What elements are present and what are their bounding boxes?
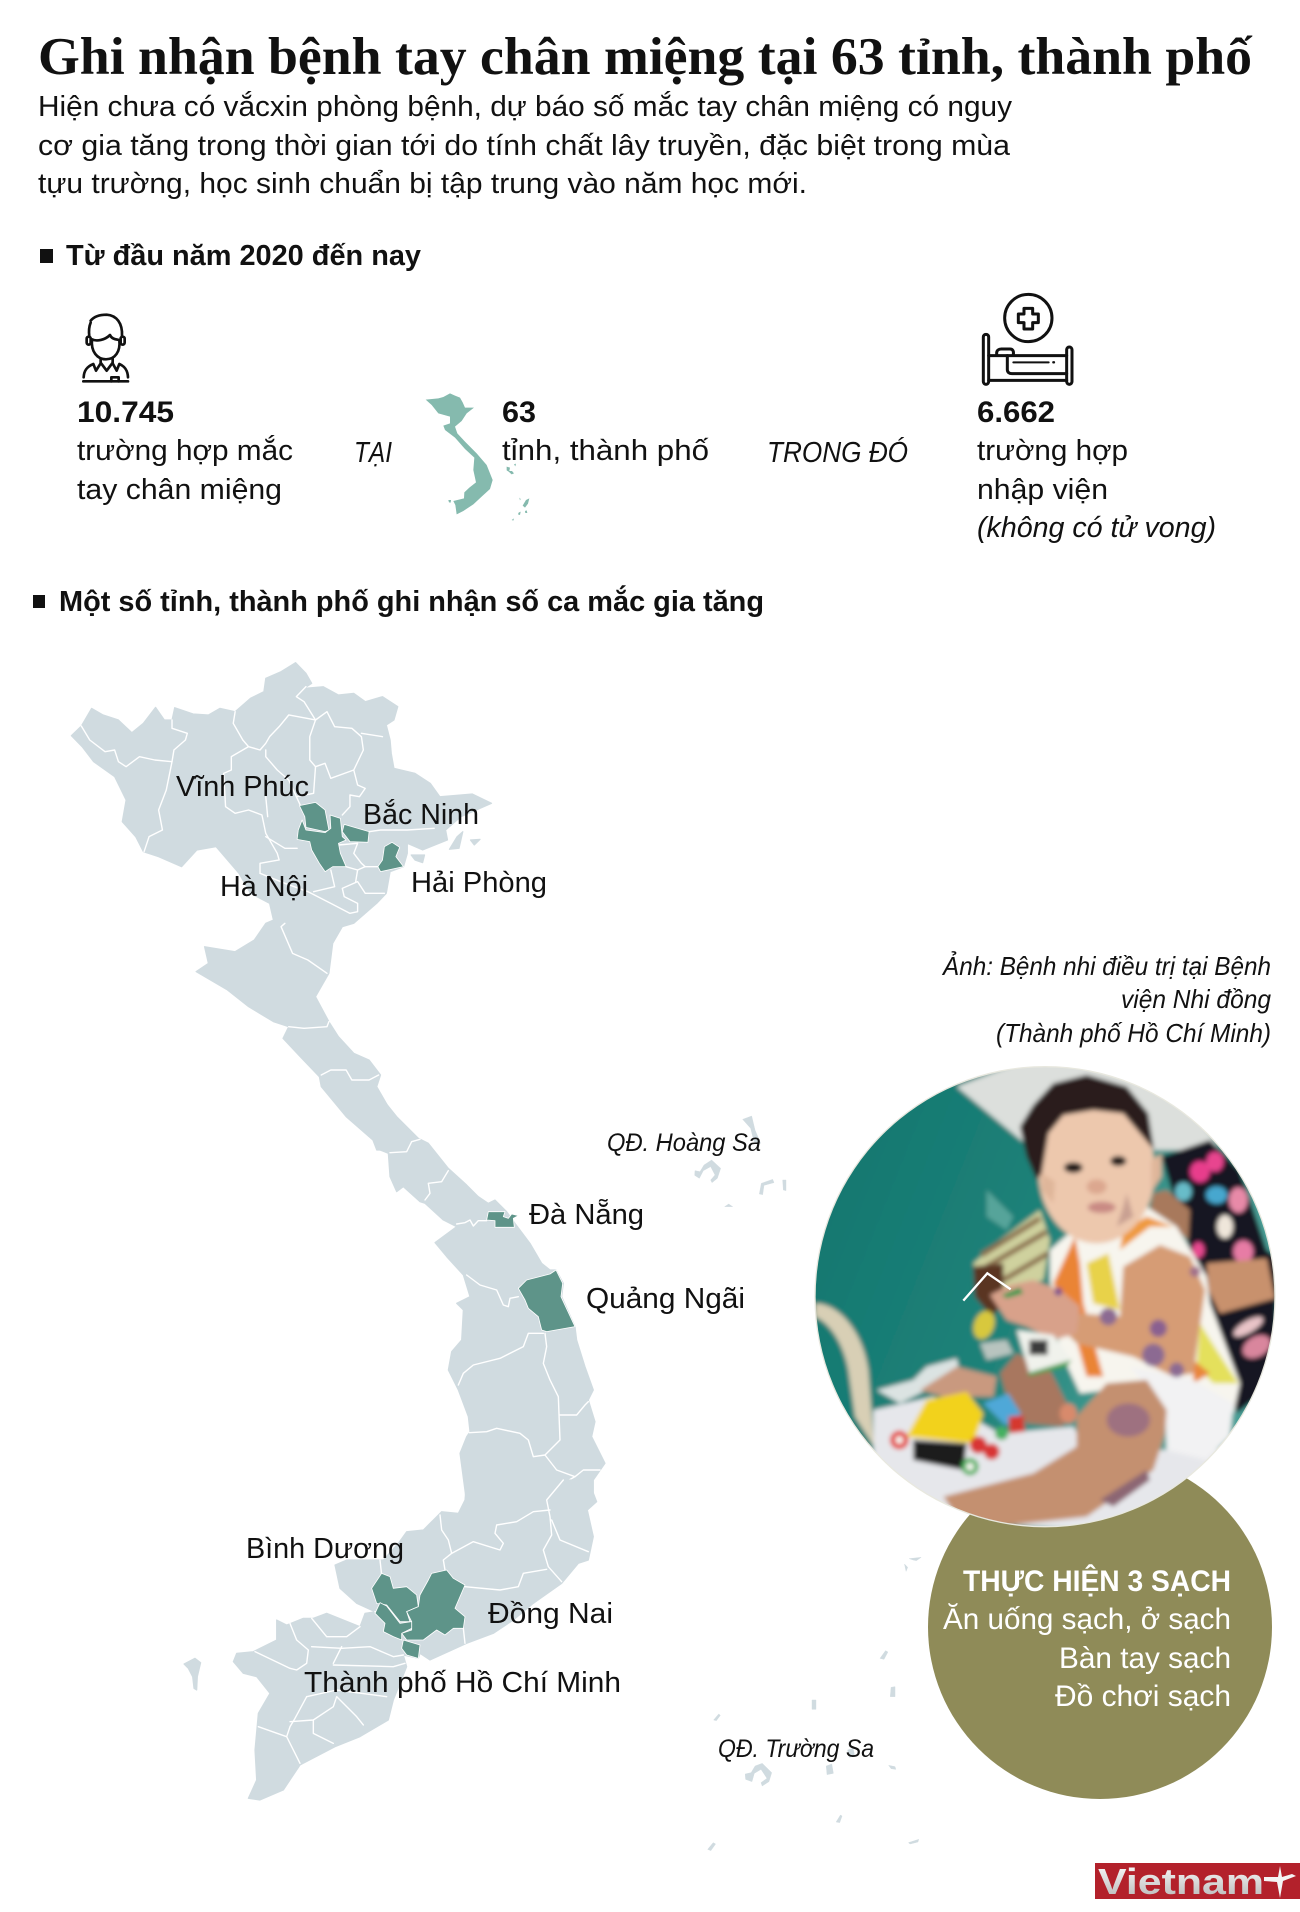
map labels: archipelagos <box>607 1129 874 1763</box>
highlighted: Dong Nai <box>402 1570 465 1640</box>
stat: provinces: tỉnh, thành phố <box>502 435 709 467</box>
highlighted: Bac Ninh <box>342 824 369 842</box>
map labels: provinces: Thành phố Hồ Chí Minh <box>304 1667 621 1699</box>
photo caption <box>941 950 1272 1048</box>
map: central region <box>335 1100 605 1503</box>
map labels: provinces: Vĩnh Phúc <box>176 771 309 803</box>
stat: cases: 10.745 <box>77 396 174 429</box>
photo: child patient <box>814 1066 1276 1528</box>
stat: cases: trường hợp mắc <box>77 434 293 467</box>
map: southern region <box>184 1480 597 1800</box>
stat: hospitalised: trường hợp <box>977 435 1128 467</box>
map labels: provinces <box>176 771 745 1699</box>
map labels: provinces: Hà Nội <box>220 871 308 903</box>
stat: hospitalised: 6.662 <box>977 396 1055 429</box>
stat: provinces: 63 <box>502 396 536 429</box>
stat: cases: tay chân miệng <box>77 474 282 506</box>
callout: three cleans <box>928 1455 1272 1799</box>
map labels: provinces: Bình Dương <box>246 1533 404 1565</box>
callout: three cleans: Bàn tay sạch <box>1059 1642 1231 1675</box>
logo: Vietnam+: Vietnam <box>1098 1861 1264 1902</box>
callout: three cleans: Đồ chơi sạch <box>1055 1680 1231 1713</box>
photo caption: viện Nhi đồng <box>1121 984 1272 1014</box>
highlighted: Vinh Phuc <box>299 802 329 832</box>
highlighted: Da Nang <box>487 1212 518 1227</box>
stat: hospitalised <box>977 396 1216 544</box>
photo caption: Ảnh: Bệnh nhi điều trị tại Bệnh <box>941 950 1271 981</box>
highlighted: Ha Noi <box>297 815 346 872</box>
map labels: archipelagos: QĐ. Trường Sa <box>718 1735 874 1763</box>
photo caption: (Thành phố Hồ Chí Minh) <box>996 1018 1271 1048</box>
heading: provinces with rising cases: Một số tỉnh, thành phố ghi nhận số ca mắc gia tăng <box>59 584 764 618</box>
stat: hospitalised: (không có tử vong) <box>977 512 1216 544</box>
logo: Vietnam+ <box>1095 1861 1300 1902</box>
highlighted: Binh Duong <box>372 1573 418 1622</box>
islands: Hoang Sa <box>695 1116 786 1207</box>
highlighted: Hai Phong <box>378 842 404 872</box>
stat: provinces <box>502 396 709 467</box>
map labels: provinces: Quảng Ngãi <box>586 1283 745 1315</box>
intro text: cơ gia tăng trong thời gian tới do tính chất lây truyền, đặc biệt trong mùa <box>38 130 1011 162</box>
intro text: tựu trường, học sinh chuẩn bị tập trung vào năm học mới. <box>38 168 807 200</box>
intro text <box>38 90 1013 200</box>
label: of which: TRONG ĐÓ <box>767 436 908 469</box>
map labels: archipelagos: QĐ. Hoàng Sa <box>607 1129 761 1157</box>
map labels: provinces: Đồng Nai <box>488 1598 613 1630</box>
stat: hospitalised: nhập viện <box>977 474 1108 506</box>
intro text: Hiện chưa có vắcxin phòng bệnh, dự báo số mắc tay chân miệng có nguy <box>38 90 1013 123</box>
map: northern region <box>71 663 492 1150</box>
highlighted: Quang Ngai <box>518 1270 575 1332</box>
title: Ghi nhận bệnh tay chân miệng tại 63 tỉnh, thành phố <box>38 28 1252 86</box>
stat: cases <box>77 396 293 506</box>
islands: Truong Sa <box>708 1557 921 1851</box>
label: at: TẠI <box>354 437 392 469</box>
map of Vietnam <box>71 663 921 1851</box>
icon: mini Vietnam map <box>426 393 529 521</box>
heading: since start of 2020: Từ đầu năm 2020 đến nay <box>66 240 421 272</box>
map labels: provinces: Bắc Ninh <box>363 798 479 831</box>
highlighted: Can Gio <box>402 1640 420 1658</box>
callout: three cleans: THỰC HIỆN 3 SẠCH <box>963 1564 1231 1598</box>
highlighted: Ho Chi Minh City <box>375 1603 412 1640</box>
map labels: provinces: Đà Nẵng <box>529 1198 644 1231</box>
icon: hospital bed <box>983 294 1072 384</box>
icon: child <box>83 315 128 381</box>
map labels: provinces: Hải Phòng <box>411 867 547 899</box>
callout: three cleans: Ăn uống sạch, ở sạch <box>943 1603 1231 1636</box>
